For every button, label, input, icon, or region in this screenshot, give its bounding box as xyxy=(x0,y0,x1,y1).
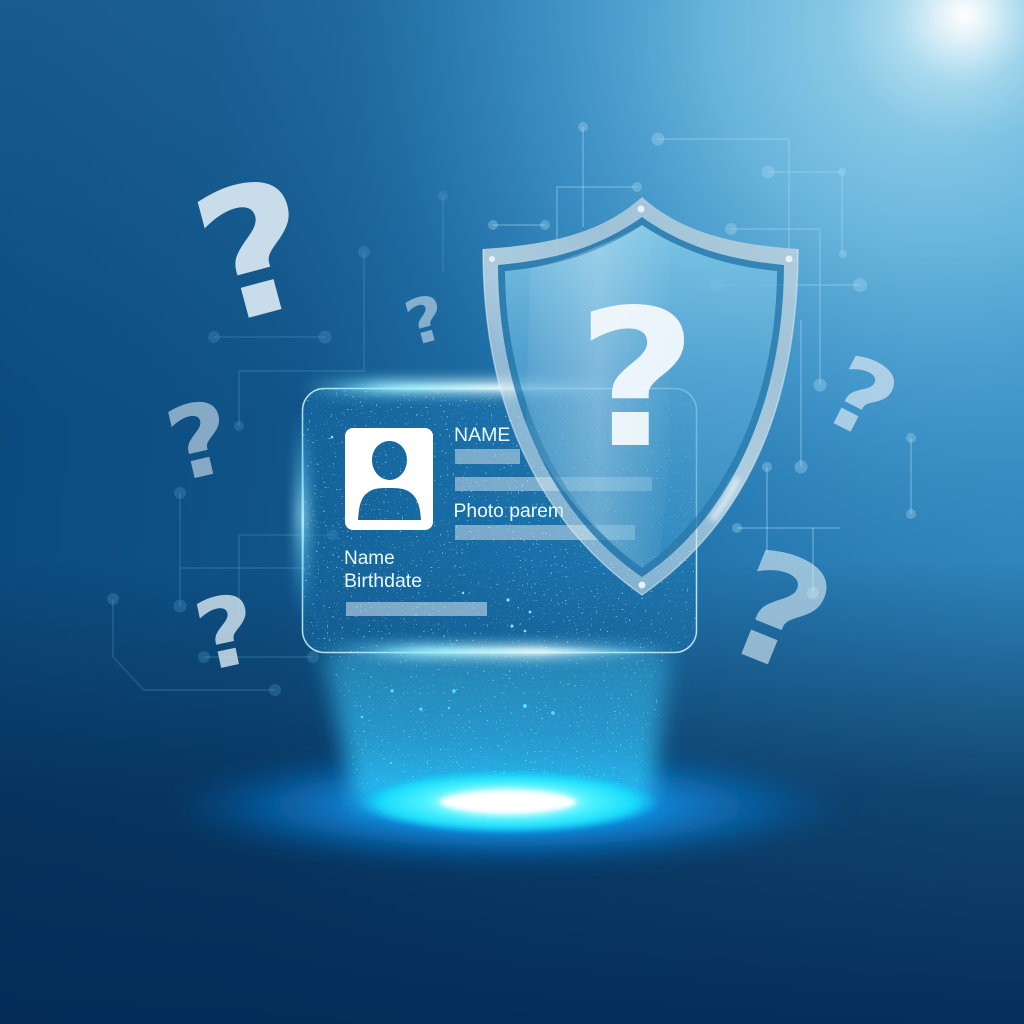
card left glow xyxy=(296,410,308,620)
circuit lines right xyxy=(488,122,916,599)
circuit lines left xyxy=(107,191,448,696)
card bottom glow xyxy=(330,645,670,658)
shield metal frame xyxy=(483,197,798,595)
card label: Birthdate: Birthdate xyxy=(344,570,422,592)
shield sheen xyxy=(526,225,670,568)
card label: Name: Name xyxy=(344,548,395,569)
question mark: bottom left: ? xyxy=(185,572,267,694)
card bar 1 xyxy=(455,449,520,464)
shield glass xyxy=(505,225,777,568)
shield rivets xyxy=(489,206,792,588)
question mark: large top left: ? xyxy=(174,138,336,367)
card bar 3 xyxy=(455,525,635,540)
card bar 2 xyxy=(455,477,652,491)
card label: NAME: NAME xyxy=(454,424,510,446)
shield question mark: ? xyxy=(576,270,698,491)
question mark: large bottom right: ? xyxy=(703,514,855,712)
question mark: left: ? xyxy=(156,377,243,506)
question mark: right: ? xyxy=(806,332,915,465)
card bar 4 xyxy=(346,602,487,616)
card label: Photo parem: Photo parem xyxy=(454,501,564,522)
portal halo xyxy=(165,746,855,866)
ID card panel xyxy=(296,380,697,658)
shield inner edge xyxy=(498,217,784,577)
bright card stars xyxy=(331,436,531,632)
photo placeholder icon xyxy=(345,428,433,530)
hologram beam xyxy=(322,650,672,805)
question mark: small top: ? xyxy=(398,281,454,361)
card top glow xyxy=(300,380,640,394)
shield xyxy=(483,197,798,595)
shield frame highlights xyxy=(483,249,798,595)
portal disc xyxy=(358,771,658,833)
